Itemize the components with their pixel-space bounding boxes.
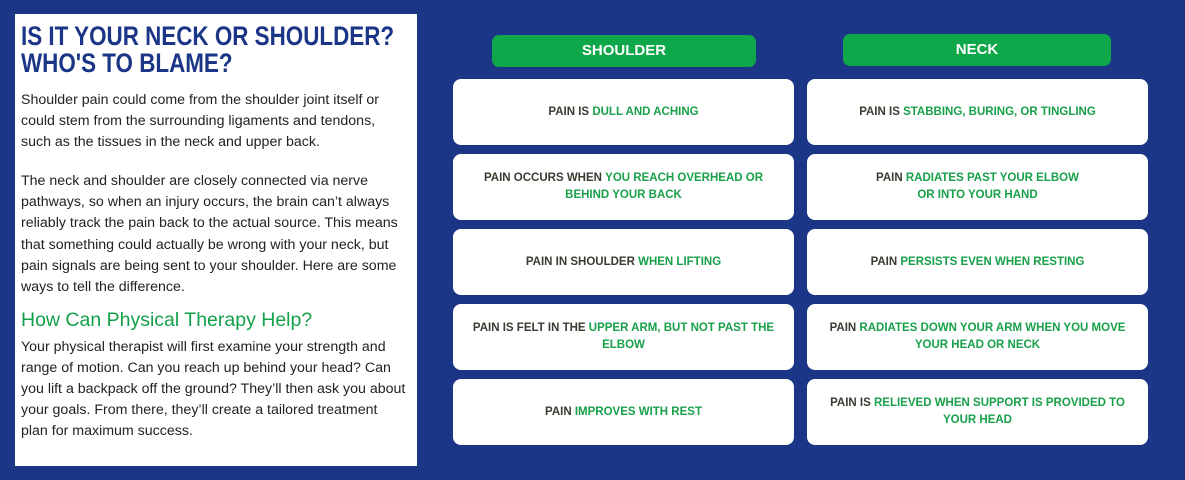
card: shoulder 1: [453, 79, 794, 145]
card: shoulder 3: [453, 229, 794, 295]
card: shoulder 5: PAIN: [545, 406, 572, 418]
card: neck 1: STABBING, BURING, OR TINGLING: [903, 106, 1096, 118]
card: shoulder 5: [453, 379, 794, 445]
card: shoulder 5: IMPROVES WITH REST: [575, 406, 702, 418]
paragraph 2: The neck and shoulder are closely connected via nerve pathways, so when an injury occurs, the brain can’t always reliably track the pain back to the actual source. This means that something could actually be wrong with your neck, but pain signals are being sent to your shoulder. Here are some ways to tell the difference.: [21, 173, 398, 295]
card: shoulder 4: PAIN IS FELT IN THE UPPER ARM, BUT NOT PAST THE ELBOW: [473, 322, 774, 351]
card: shoulder 3: WHEN LIFTING: [638, 256, 721, 268]
card: shoulder 2: PAIN OCCURS WHEN YOU REACH OVERHEAD OR BEHIND YOUR BACK: [484, 172, 763, 201]
card: neck 3: PAIN: [871, 256, 897, 268]
panel: intro text: [15, 14, 417, 466]
subheading: How Can Physical Therapy Help?: [21, 309, 312, 331]
paragraph 3: Your physical therapist will first examine your strength and range of motion. Can you reach up behind your head? Can you lift a backpack off the ground? They’ll then ask you about your goals. From there, they’ll create a tailored treatment plan for maximum success.: [21, 339, 405, 439]
header: shoulder: [492, 35, 756, 67]
header: neck: [843, 34, 1111, 66]
card: shoulder 1: DULL AND ACHING: [592, 106, 699, 118]
card: neck 5: PAIN IS RELIEVED WHEN SUPPORT IS PROVIDED TO YOUR HEAD: [830, 397, 1125, 426]
card: neck 3: PERSISTS EVEN WHEN RESTING: [900, 256, 1084, 268]
card: neck 4: [807, 304, 1148, 370]
header: neck: NECK: [956, 41, 998, 58]
card: shoulder 3: PAIN IN SHOULDER: [526, 256, 635, 268]
card: neck 2: OR INTO YOUR HAND: [917, 189, 1038, 201]
card: neck 1: [807, 79, 1148, 145]
card: neck 4: PAIN RADIATES DOWN YOUR ARM WHEN YOU MOVE YOUR HEAD OR NECK: [830, 322, 1125, 351]
card: neck 1: PAIN IS: [859, 106, 900, 118]
card: shoulder 2: [453, 154, 794, 220]
paragraph 1: Shoulder pain could come from the shoulder joint itself or could stem from the surrounding ligaments and tendons, such as the tissues in the neck and upper back.: [21, 92, 379, 150]
header: shoulder: SHOULDER: [582, 42, 666, 59]
title: WHO'S TO BLAME?: [21, 48, 233, 78]
card: neck 5: [807, 379, 1148, 445]
title: [21, 21, 394, 78]
card: neck 2: PAIN RADIATES PAST YOUR ELBOW: [876, 172, 1079, 184]
card: shoulder 4: [453, 304, 794, 370]
title: IS IT YOUR NECK OR SHOULDER?: [21, 21, 394, 51]
card: neck 2: [807, 154, 1148, 220]
card: shoulder 1: PAIN IS: [548, 106, 589, 118]
card: neck 3: [807, 229, 1148, 295]
